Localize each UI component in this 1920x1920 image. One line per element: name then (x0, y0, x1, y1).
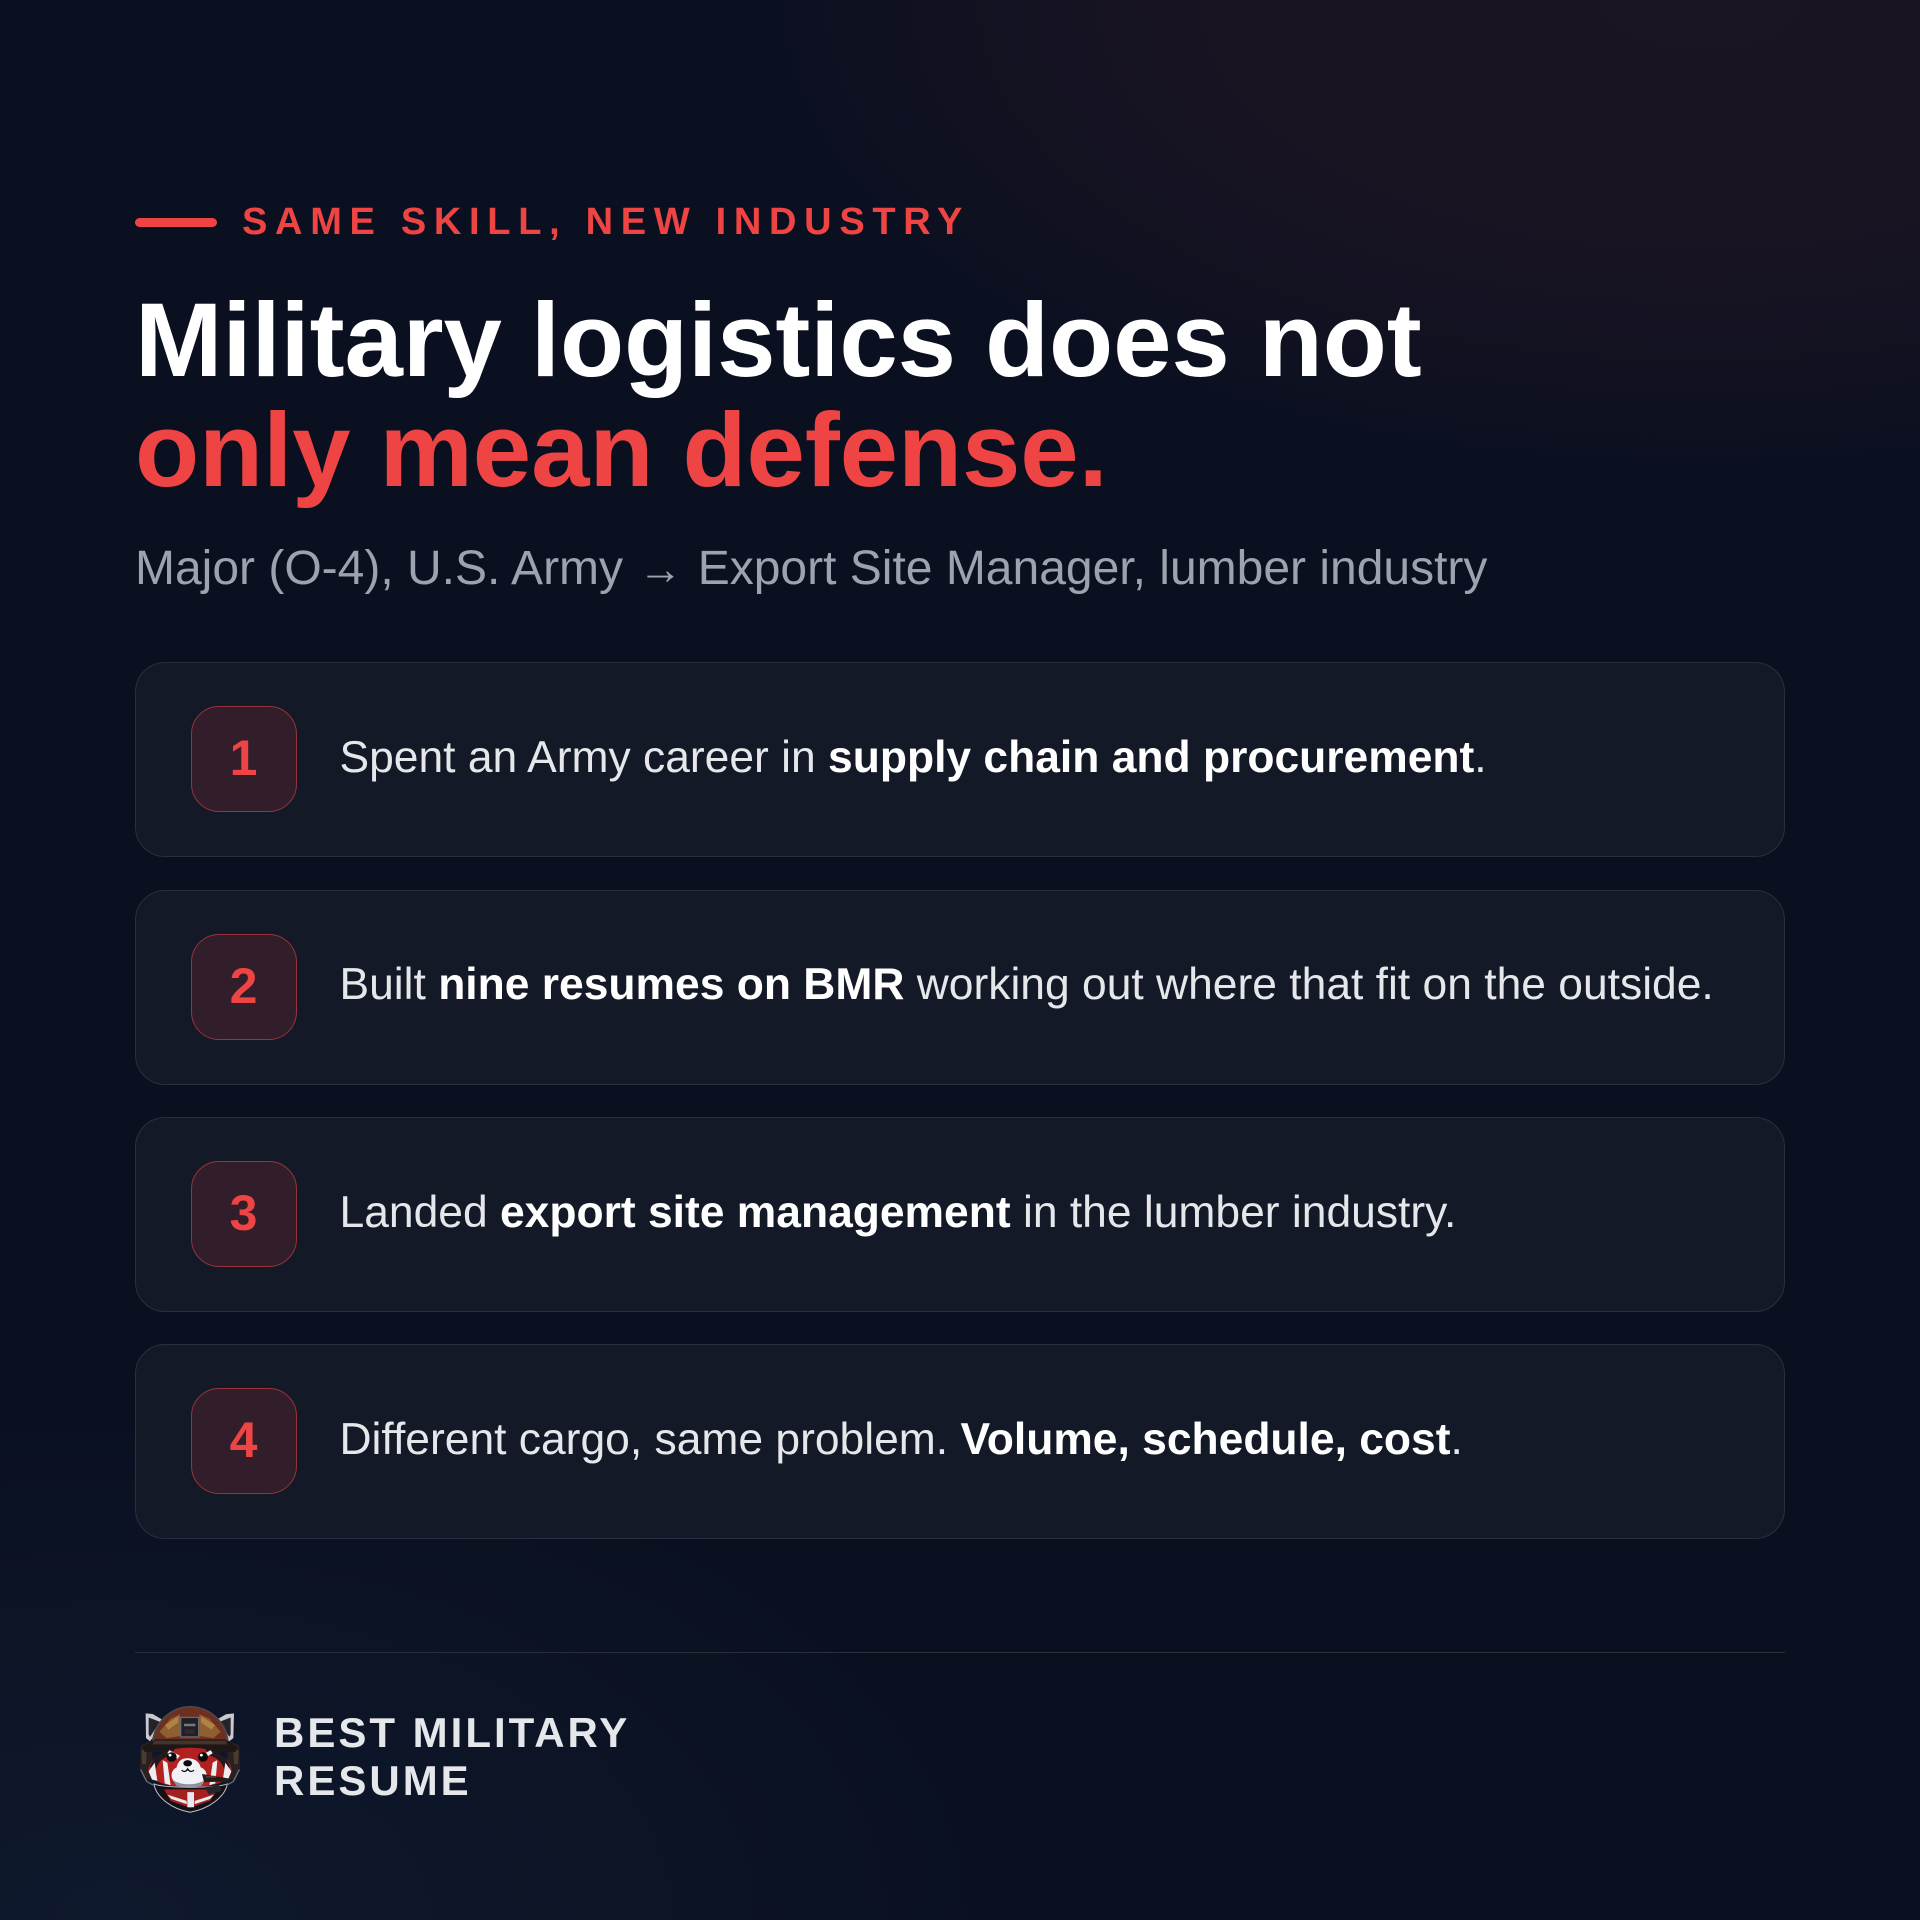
eyebrow label: SAME SKILL, NEW INDUSTRY (242, 201, 970, 243)
badge 4 (190, 1388, 296, 1494)
brand name (274, 1709, 630, 1804)
helmet mount (181, 1717, 199, 1737)
title: only mean defense. (135, 392, 1108, 508)
eyes (167, 1752, 177, 1762)
card 2 text: Built nine resumes on BMR working out where that fit on the outside. (340, 960, 1714, 1009)
badge 3: 3 (230, 1185, 257, 1241)
title: Military logistics does not (135, 282, 1422, 398)
face (148, 1748, 232, 1787)
brand name: RESUME (274, 1757, 472, 1804)
badge 2 (190, 934, 296, 1040)
helmet (153, 1707, 228, 1743)
footer divider (135, 1652, 1785, 1653)
ears (146, 1713, 165, 1741)
card 1 (135, 662, 1785, 857)
side cords (141, 1770, 153, 1785)
microphone (202, 1774, 229, 1782)
earcups (140, 1741, 153, 1781)
card 4 (135, 1344, 1785, 1539)
brand name: BEST MILITARY (274, 1709, 630, 1756)
card 2 (135, 890, 1785, 1084)
badge 1: 1 (230, 730, 257, 786)
badge 3 (190, 1161, 296, 1267)
card 4 text: Different cargo, same problem. Volume, schedule, cost. (340, 1414, 1463, 1464)
card 3 text: Landed export site management in the lumber industry. (340, 1188, 1456, 1236)
helmet band (143, 1739, 237, 1752)
badge 2: 2 (230, 958, 257, 1014)
card 1 text: Spent an Army career in supply chain and procurement. (340, 732, 1487, 782)
title (135, 282, 1422, 508)
nose and mouth (183, 1760, 192, 1766)
muzzle (172, 1758, 207, 1786)
subtitle: Major (O-4), U.S. Army → Export Site Manager, lumber industry (135, 542, 1487, 594)
icon: red panda logo (140, 1706, 240, 1813)
eyebrow accent line (135, 218, 217, 227)
card 3 (135, 1117, 1785, 1312)
badge 4: 4 (230, 1412, 257, 1468)
badge 1 (190, 706, 296, 812)
brow patches (167, 1750, 213, 1759)
cheek stripes (149, 1760, 231, 1785)
bandana (154, 1784, 227, 1812)
